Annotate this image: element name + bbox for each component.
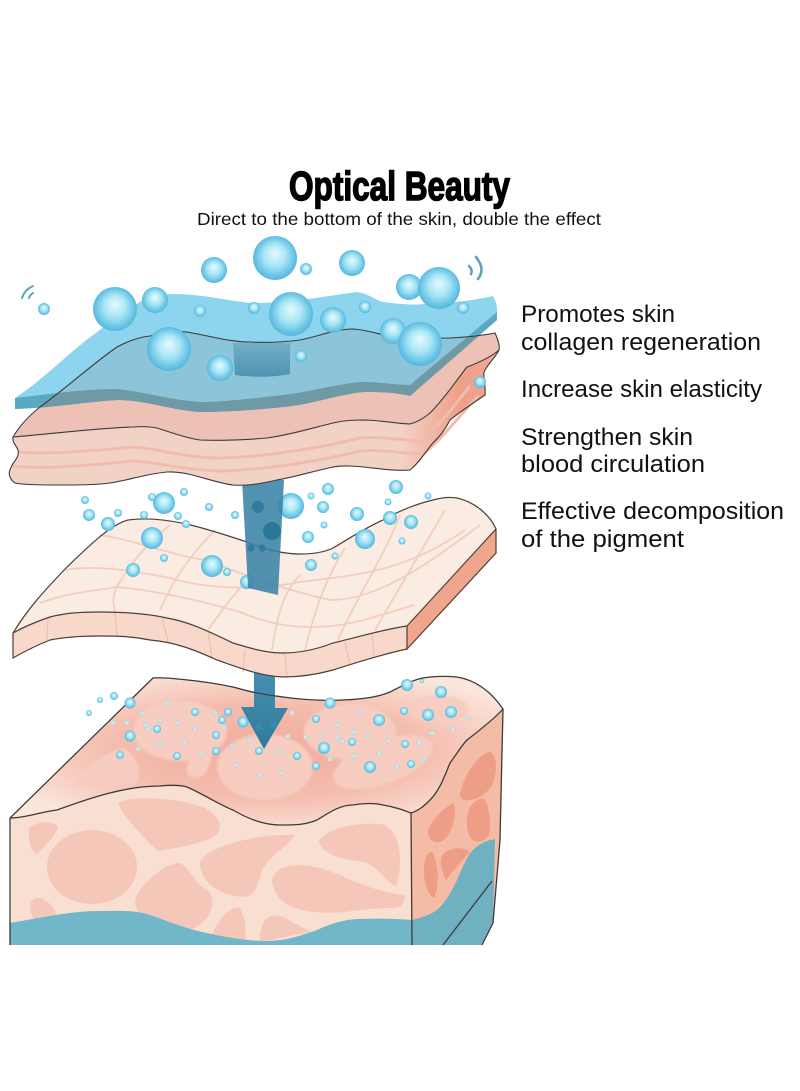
block side blobs (424, 752, 496, 898)
benefit: pigment decomposition: of the pigment (521, 526, 684, 553)
benefit: blood circulation: blood circulation (521, 451, 705, 478)
benefit: collagen regeneration (521, 301, 761, 356)
pink epidermis (9, 329, 499, 485)
blue base band, side (412, 839, 495, 945)
benefit: blood circulation (521, 424, 705, 478)
pink layer outline (9, 329, 499, 485)
water over pink overlap (40, 330, 478, 412)
skin layer 3: deep block (10, 660, 503, 945)
benefit: pigment decomposition (521, 498, 784, 553)
title: Optical Beauty (289, 163, 510, 209)
skin layer 1: top layers with serum (9, 236, 499, 485)
infographic canvas (8, 170, 782, 946)
sheet right edge (407, 529, 496, 649)
blue base band, front (10, 911, 412, 945)
skin layer 2: middle sheet (13, 480, 496, 677)
central absorbing patch (233, 343, 290, 377)
icon: right ripple marks (469, 257, 482, 279)
upper arrow shaft (242, 480, 284, 595)
top surface light patches (75, 695, 468, 800)
sheet front edge (13, 612, 407, 677)
droplets around sheet (81, 480, 432, 589)
benefit: blood circulation: Strengthen skin (521, 424, 693, 451)
benefit: collagen regeneration: collagen regeneration (521, 329, 761, 356)
block right side (411, 709, 503, 945)
line across arrow (233, 687, 283, 697)
sheet front creases (47, 612, 374, 677)
block front face (10, 785, 412, 945)
benefits list (521, 301, 784, 553)
block outline (10, 676, 503, 945)
lower arrow (241, 660, 288, 749)
sheet top surface (13, 497, 496, 653)
sheet outline (13, 497, 496, 677)
benefit: pigment decomposition: Effective decomposition (521, 498, 784, 525)
benefit: elasticity: Increase skin elasticity (521, 376, 762, 403)
subtitle: Direct to the bottom of the skin, double the effect (197, 209, 601, 229)
pink front face (9, 350, 499, 485)
benefit: collagen regeneration: Promotes skin (521, 301, 675, 328)
block top surface (10, 676, 503, 825)
small faint droplets on block (110, 700, 470, 778)
block front blobs (29, 798, 404, 942)
icon: left ripple marks (22, 286, 33, 298)
sheet grid lines (40, 510, 480, 650)
serum bubbles (38, 236, 486, 388)
bright droplets on block (86, 679, 457, 773)
pink strata lines (12, 386, 478, 471)
serum water layer (15, 292, 497, 412)
